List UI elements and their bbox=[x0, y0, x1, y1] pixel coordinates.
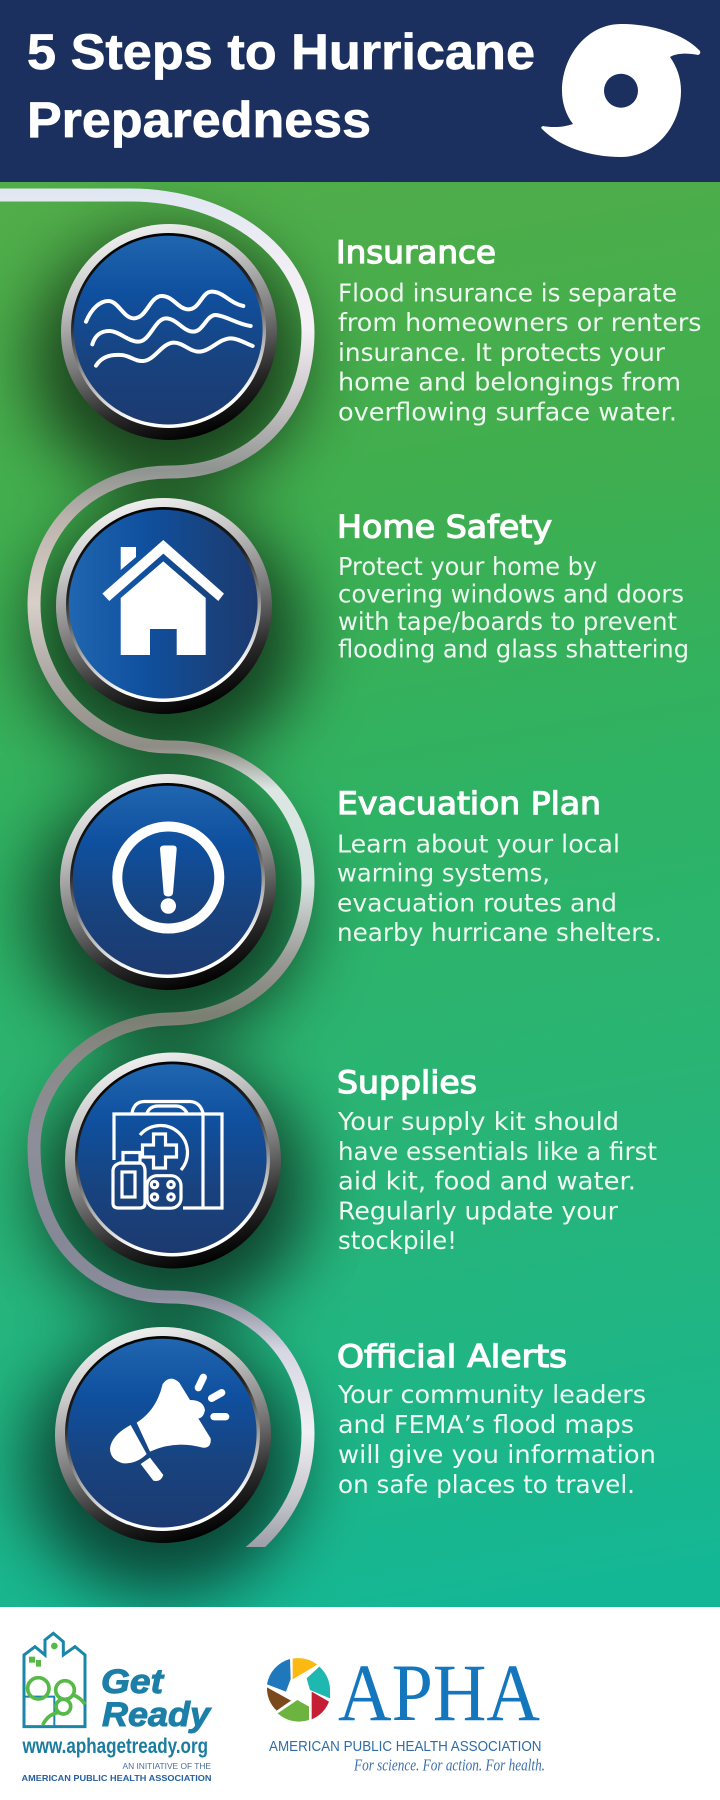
text block: insurance: Flood insurance is separate bbox=[338, 278, 677, 308]
logo: APHA: APHA bbox=[338, 1647, 540, 1738]
icon: megaphone bbox=[110, 1377, 226, 1481]
title: Preparedness bbox=[27, 92, 371, 148]
text block: evacuation plan: evacuation routes and bbox=[337, 889, 617, 918]
text block: home safety: covering windows and doors bbox=[338, 579, 684, 608]
text block: supplies: stockpile! bbox=[338, 1226, 457, 1255]
text block: evacuation plan bbox=[337, 786, 662, 947]
logo: Get Ready: AMERICAN PUBLIC HEALTH ASSOCIATION bbox=[22, 1773, 211, 1783]
text block: home safety: Protect your home by bbox=[338, 552, 597, 581]
text block: home safety: with tape/boards to prevent bbox=[338, 607, 677, 636]
text block: evacuation plan: Evacuation Plan bbox=[337, 786, 601, 822]
step 4 badge: supplies bbox=[65, 1052, 281, 1268]
text block: insurance bbox=[336, 235, 702, 426]
icon: hurricane symbol bbox=[541, 24, 700, 157]
logo: APHA: AMERICAN PUBLIC HEALTH ASSOCIATION bbox=[269, 1739, 542, 1755]
step 1 badge: insurance waves bbox=[61, 224, 277, 440]
circle drop shadows bbox=[27, 234, 309, 1594]
text block: home safety bbox=[337, 510, 689, 663]
title: 5 Steps to Hurricane bbox=[27, 24, 535, 80]
text block: supplies: Your supply kit should bbox=[337, 1107, 619, 1136]
header banner bbox=[0, 0, 720, 182]
text block: official alerts: and FEMA’s flood maps bbox=[338, 1410, 634, 1439]
icon: first aid kit bbox=[113, 1102, 222, 1208]
logo: APHA bbox=[267, 1647, 545, 1775]
text block: supplies: Supplies bbox=[337, 1065, 477, 1101]
logo: Get Ready bbox=[22, 1633, 212, 1783]
text block: official alerts: Your community leaders bbox=[337, 1380, 646, 1409]
text block: supplies: have essentials like a first bbox=[338, 1137, 657, 1166]
text block: official alerts: will give you information bbox=[338, 1440, 656, 1469]
text block: home safety: Home Safety bbox=[337, 510, 552, 546]
green gradient panel bbox=[0, 182, 720, 1607]
text block: evacuation plan: Learn about your local bbox=[337, 829, 620, 858]
icon: exclamation mark bbox=[117, 826, 219, 928]
text block: supplies: aid kit, food and water. bbox=[338, 1166, 636, 1195]
step 2 badge: home safety bbox=[56, 498, 272, 714]
text block: home safety: flooding and glass shattering bbox=[338, 634, 689, 663]
logo: Get Ready: Get bbox=[101, 1663, 165, 1701]
icon: Get Ready house bbox=[24, 1633, 85, 1727]
text block: insurance: home and belongings from bbox=[338, 368, 681, 396]
text block: official alerts: on safe places to travel. bbox=[338, 1470, 635, 1499]
title bbox=[27, 24, 535, 148]
text block: evacuation plan: warning systems, bbox=[337, 859, 550, 888]
icon: water waves bbox=[86, 292, 253, 366]
icon: APHA pinwheel bbox=[267, 1658, 330, 1722]
text block: evacuation plan: nearby hurricane shelters. bbox=[337, 918, 662, 947]
step 5 badge: official alerts bbox=[55, 1327, 271, 1543]
text block: official alerts: Official Alerts bbox=[337, 1339, 567, 1375]
winding ribbon connector bbox=[0, 195, 308, 1570]
logo: APHA: For science. For action. For health. bbox=[353, 1756, 545, 1775]
text block: supplies bbox=[337, 1065, 657, 1255]
logo: Get Ready: AN INITIATIVE OF THE bbox=[122, 1762, 211, 1771]
text block: insurance: overflowing surface water. bbox=[338, 398, 677, 426]
icon: house bbox=[102, 540, 224, 655]
logo: Get Ready: Ready bbox=[102, 1696, 212, 1734]
text block: supplies: Regularly update your bbox=[338, 1196, 619, 1225]
text block: insurance: from homeowners or renters bbox=[338, 308, 702, 337]
step 3 badge: evacuation warning bbox=[60, 774, 276, 990]
text block: insurance: Insurance bbox=[336, 235, 496, 271]
logo: Get Ready: www.aphagetready.org bbox=[22, 1735, 208, 1758]
text block: official alerts bbox=[337, 1339, 656, 1499]
text block: insurance: insurance. It protects your bbox=[338, 338, 666, 367]
